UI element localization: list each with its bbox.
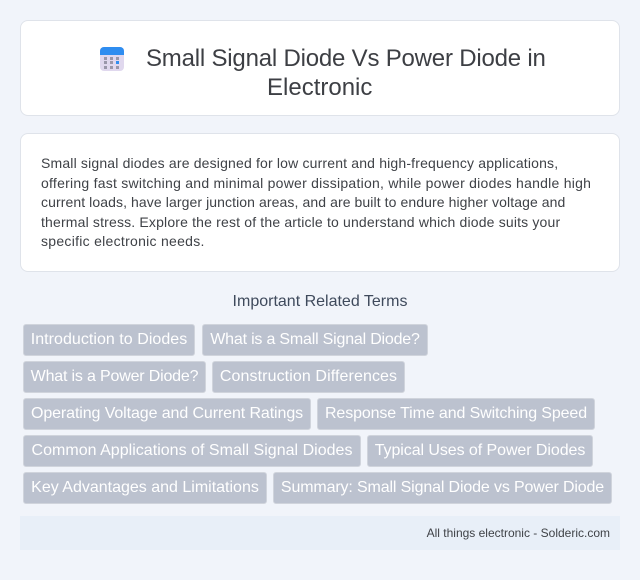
intro paragraph: Small signal diodes are designed for low current and high-frequency applications, [41,155,558,171]
chip [202,324,428,356]
intro paragraph: thermal stress. Explore the rest of the article to understand which diode suits your [41,214,560,230]
chip [212,361,405,393]
chip: Common Applications of Small Signal Diodes [32,442,352,459]
icon: calendar [100,47,124,71]
chip: Introduction to Diodes [31,331,187,348]
chip [23,324,195,356]
chip [23,435,361,467]
title line 2: Electronic [267,74,372,101]
chip [23,398,311,430]
chip [23,361,206,393]
chip: Summary: Small Signal Diode vs Power Diode [281,479,604,496]
chip [317,398,595,430]
chip: Construction Differences [220,368,397,385]
intro paragraph: offering fast switching and minimal power dissipation, while power diodes handle high [41,175,591,191]
chip [367,435,593,467]
header card [20,20,620,116]
chip [273,472,612,504]
footer text: All things electronic - Solderic.com [427,526,610,540]
intro text card [20,133,620,272]
chip: Response Time and Switching Speed [325,405,587,422]
chip: Operating Voltage and Current Ratings [31,405,303,422]
chip [23,472,267,504]
intro paragraph: current loads, have larger junction areas, and are built to endure higher voltage and [41,194,565,210]
chip: What is a Power Diode? [31,368,198,385]
title line 1: Small Signal Diode Vs Power Diode in [146,45,546,72]
intro paragraph [41,155,591,249]
intro paragraph: specific electronic needs. [41,233,205,249]
chip: Key Advantages and Limitations [31,479,259,496]
chip: What is a Small Signal Diode? [210,331,420,348]
related terms chips [23,324,612,504]
chip: Typical Uses of Power Diodes [375,442,585,459]
footer bar [20,516,620,550]
related terms heading: Important Related Terms [233,293,407,310]
